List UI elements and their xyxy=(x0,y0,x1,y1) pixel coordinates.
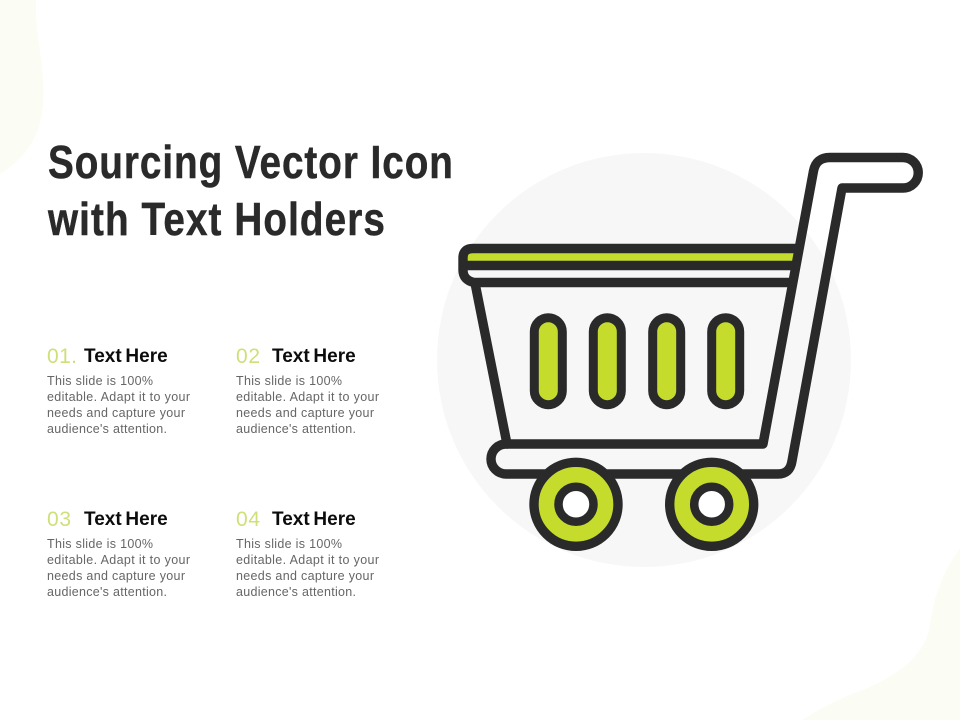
text holder 04: needs and capture your xyxy=(236,569,374,583)
basket slots xyxy=(534,318,740,405)
text holder 03: Text Here xyxy=(84,509,168,530)
text holder 03: This slide is 100% xyxy=(47,537,153,551)
cart handle and frame xyxy=(491,158,918,474)
left wheel xyxy=(534,462,618,546)
right wheel xyxy=(670,462,754,546)
text holder 04: 04 xyxy=(236,508,260,531)
background blob: bottom right xyxy=(802,548,960,720)
background blob: top left xyxy=(0,0,43,174)
text holder 03: audience's attention. xyxy=(47,585,167,599)
text holder 01: This slide is 100% xyxy=(47,374,153,388)
text holder 04: Text Here xyxy=(272,509,356,530)
text holder 01: needs and capture your xyxy=(47,406,185,420)
text holder 02: This slide is 100% xyxy=(236,374,342,388)
text holder 02: audience's attention. xyxy=(236,422,356,436)
text holder 01: 01. xyxy=(47,345,77,368)
text holder 01: Text Here xyxy=(84,346,168,367)
text holder 02 xyxy=(236,345,379,436)
text holder 03: needs and capture your xyxy=(47,569,185,583)
title: with Text Holders xyxy=(47,194,385,245)
text holder 01: audience's attention. xyxy=(47,422,167,436)
text holder 03 xyxy=(47,508,190,599)
icon: shopping cart xyxy=(463,158,918,546)
rim green stripe xyxy=(463,248,798,266)
text holder 04: audience's attention. xyxy=(236,585,356,599)
title: Sourcing Vector Icon xyxy=(48,137,453,188)
title xyxy=(47,137,453,245)
cart rim outline xyxy=(463,248,798,282)
text holder 02: needs and capture your xyxy=(236,406,374,420)
basket left side xyxy=(475,283,507,444)
text holder 01 xyxy=(47,345,190,436)
text holder 02: editable. Adapt it to your xyxy=(236,390,379,404)
text holder 04: editable. Adapt it to your xyxy=(236,553,379,567)
text holder 02: 02 xyxy=(236,345,260,368)
text holder 03: 03 xyxy=(47,508,71,531)
background circle xyxy=(437,153,851,567)
text holder 04: This slide is 100% xyxy=(236,537,342,551)
text holder 01: editable. Adapt it to your xyxy=(47,390,190,404)
text holder 02: Text Here xyxy=(272,346,356,367)
text holder 03: editable. Adapt it to your xyxy=(47,553,190,567)
text holder 04 xyxy=(236,508,379,599)
